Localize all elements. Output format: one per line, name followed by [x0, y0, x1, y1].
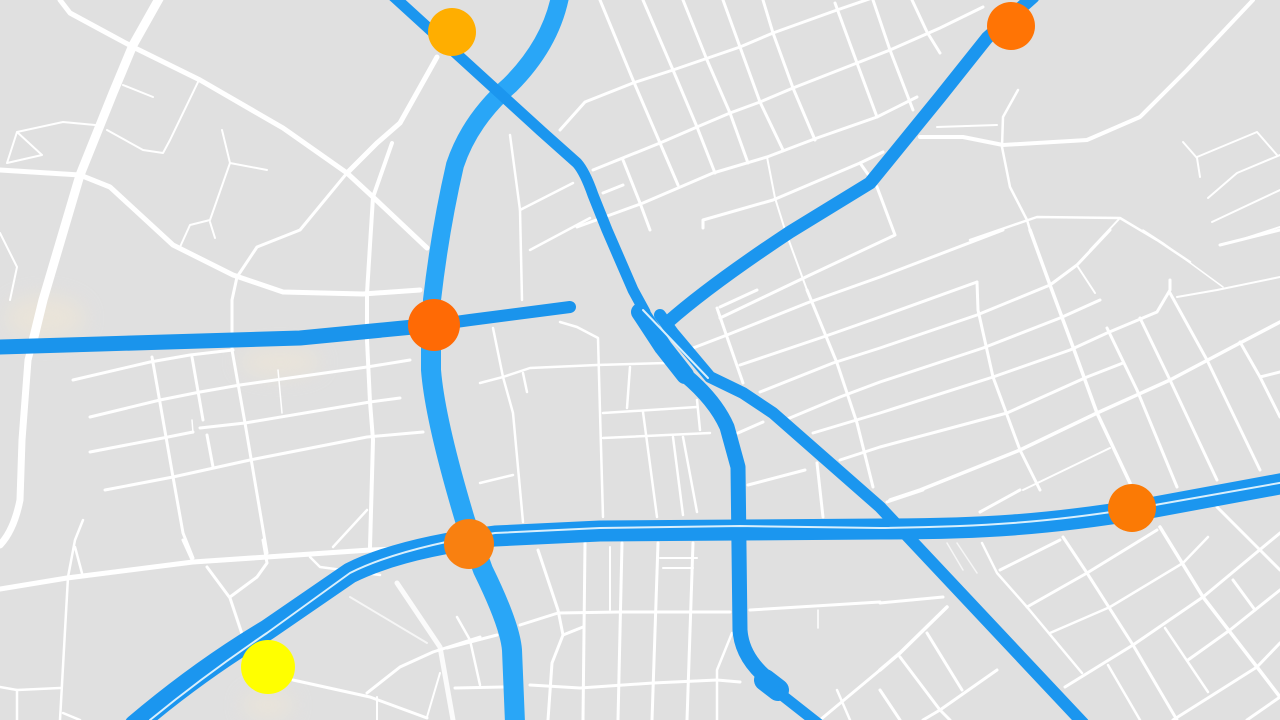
marker: orange centre-west	[408, 299, 460, 351]
route: east-west highway	[135, 483, 1280, 720]
west street grid	[73, 350, 423, 558]
marker: orange south centre	[444, 519, 494, 569]
route: light blue north-south upper	[432, 0, 560, 300]
east street grid	[693, 230, 1280, 517]
north-east arterial and side streets	[920, 0, 1280, 262]
route: junction white line	[643, 310, 708, 378]
south-west streets	[0, 520, 503, 720]
route: light blue north-south lower	[431, 340, 515, 720]
west side streets	[0, 82, 267, 300]
south-central street grid	[520, 543, 880, 720]
route: highway centre line	[150, 482, 1280, 720]
route: diagonal from north-west	[392, 0, 645, 312]
marker: amber north	[428, 8, 476, 56]
north-east street grid	[560, 0, 983, 318]
marker: orange east	[1108, 484, 1156, 532]
warm map patches	[5, 296, 320, 719]
route: junction upper segment	[640, 312, 685, 375]
central streets	[480, 135, 710, 522]
route: central south blob	[765, 680, 778, 690]
marker: orange north-east	[987, 2, 1035, 50]
marker: yellow south-west	[241, 640, 295, 694]
route: central south end	[778, 692, 820, 720]
route: west-east top end	[434, 307, 570, 325]
south-east street grid	[880, 490, 1280, 720]
route: central south branch	[685, 375, 773, 683]
route: west-east top	[0, 325, 434, 347]
route: north-east branch	[668, 0, 1033, 322]
route: junction right segment	[660, 315, 1083, 720]
west arterial roads	[0, 0, 440, 589]
